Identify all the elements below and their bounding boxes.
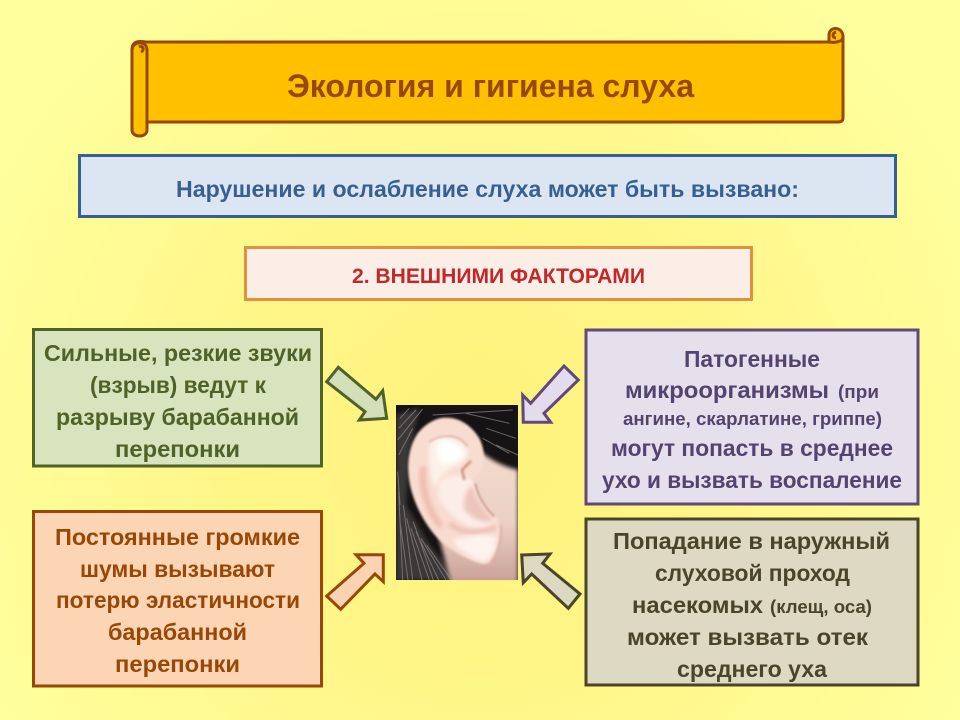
panel: loud sounds: перепонки: [115, 436, 240, 462]
panel: subtitle: Нарушение и ослабление слуха может быть вызвано:: [176, 176, 799, 202]
panel: insects: слуховой проход: [655, 560, 850, 586]
icon: ear photo: [396, 405, 518, 583]
hair strands: [398, 408, 518, 580]
tragus crease: [462, 461, 471, 480]
panel: loud sounds: Сильные, резкие звуки: [44, 340, 312, 366]
panel: pathogenic microorganisms: ангине, скарлатине, гриппе): [623, 408, 882, 429]
arrow: purple: [523, 366, 578, 422]
arrow: grey: [522, 554, 580, 608]
panel: insects: насекомых: [632, 592, 763, 618]
arrow: green: [327, 367, 387, 420]
outer ear: [408, 418, 500, 564]
lower fold: [449, 523, 496, 532]
panel: pathogenic microorganisms: ухо и вызвать воспаление: [602, 467, 902, 493]
antihelix groove: [423, 467, 441, 527]
panel: constant noise: перепонки: [115, 651, 240, 677]
panel: section heading: 2. ВНЕШНИМИ ФАКТОРАМИ: [352, 265, 645, 288]
left hair tone: [396, 408, 451, 580]
panel: insects: Попадание в наружный: [613, 528, 890, 554]
panel: insects: (клещ, оса): [770, 596, 872, 617]
panel: constant noise: [34, 512, 322, 686]
panel: loud sounds: разрыву барабанной: [56, 404, 299, 430]
title: Экология и гигиена слуха: [287, 68, 694, 104]
panel: pathogenic microorganisms: [586, 330, 918, 504]
panel: section heading: [246, 248, 752, 300]
panel: pathogenic microorganisms: могут попасть в среднее: [611, 435, 893, 461]
panel: constant noise: барабанной: [108, 619, 247, 645]
helix inner fold: [429, 436, 468, 447]
scapha highlight: [429, 436, 468, 488]
panel: pathogenic microorganisms: (при: [838, 381, 879, 402]
panel: constant noise: потерю эластичности: [56, 587, 300, 613]
panel: insects: [586, 519, 918, 685]
panel: insects: среднего уха: [677, 656, 828, 682]
panel: subtitle: [80, 156, 896, 216]
panel: pathogenic microorganisms: Патогенные: [684, 346, 820, 372]
ear lobe: [453, 535, 496, 562]
lobe crease: [491, 525, 501, 562]
panel: loud sounds: (взрыв) ведут к: [90, 372, 266, 398]
panel: loud sounds: [34, 330, 322, 466]
title banner scroll: [132, 28, 843, 136]
concha: [438, 476, 495, 527]
panel: pathogenic microorganisms: микроорганизмы: [625, 377, 829, 403]
arrow: orange: [327, 555, 383, 609]
neck skin: [439, 448, 518, 583]
panel: insects: может вызвать отек: [627, 624, 868, 650]
panel: constant noise: шумы вызывают: [80, 556, 275, 582]
panel: constant noise: Постоянные громкие: [55, 524, 300, 550]
